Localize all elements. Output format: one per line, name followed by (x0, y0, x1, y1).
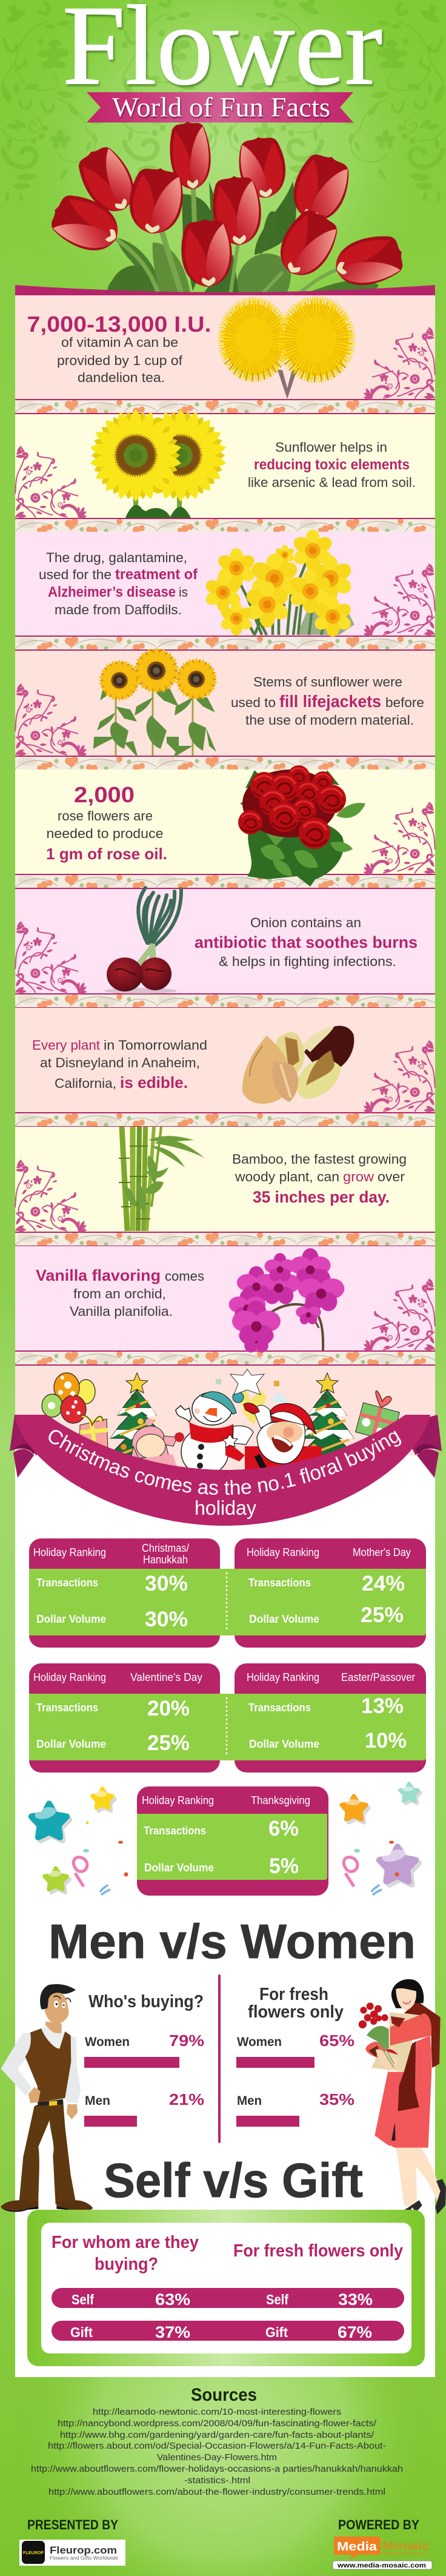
curved ribbon banner (15, 1415, 430, 1526)
tulip bouquet (45, 120, 408, 297)
logo: Media Mosaic: Differentiate yourself... (382, 2552, 428, 2556)
sources: http://www.aboutflowers.com/about-the-flower-industry/consumer-trends.html (48, 2487, 385, 2497)
subtitle ribbon: World of Fun Facts (112, 92, 330, 122)
fact text: Vanilla planifolia. (70, 1304, 173, 1319)
powered by: POWERED BY (338, 2517, 419, 2532)
logo: Fleurop: FLEUROP (23, 2550, 44, 2555)
row: gift: Gift (265, 2324, 288, 2340)
panel: Christmas banner (10, 1366, 442, 1526)
fact text: comes (165, 1269, 204, 1284)
fact text (32, 1038, 207, 1092)
headings (52, 2233, 403, 2274)
presented by (19, 2517, 125, 2566)
table: Easter/Passover: Dollar Volume (249, 1738, 319, 1750)
fact text: at Disneyland in Anaheim, (40, 1055, 200, 1070)
icon: rose bouquet (238, 765, 365, 887)
sources: Valentines-Day-Flowers.htm (157, 2452, 277, 2463)
magenta band (15, 285, 435, 295)
table: Thanksgiving: 5% (269, 1854, 299, 1878)
ribbon tails (10, 1415, 442, 1478)
fact text (248, 440, 416, 490)
logo: Media Mosaic: Media (337, 2540, 378, 2554)
sources: Sources (191, 2385, 257, 2405)
panel: self vs gift (27, 2210, 425, 2366)
panel: dandelion fact (15, 295, 436, 414)
table: Christmas/Hanukkah: 30% (145, 1572, 188, 1595)
divider (218, 1974, 221, 2143)
table: Valentine's Day: 20% (147, 1697, 190, 1720)
fact text: dandelion tea. (78, 370, 165, 385)
fact text: like arsenic & lead from soil. (248, 475, 416, 490)
icon: three sunflowers (93, 645, 220, 758)
icon: red onions (104, 888, 181, 994)
table: Thanksgiving: Dollar Volume (144, 1862, 214, 1874)
table: Valentine's Day: Transactions (36, 1702, 98, 1714)
table: Mother's Day: Dollar Volume (249, 1613, 319, 1625)
powered by (333, 2517, 432, 2569)
table: Mother's Day (247, 1546, 411, 1627)
fact text: 2,000 (74, 782, 135, 807)
panel: onion fact (15, 888, 435, 1008)
icon: bamboo (119, 1127, 205, 1231)
panel: bamboo fact (15, 1127, 435, 1247)
logo: Fleurop (19, 2540, 125, 2566)
heading: Men v/s Women: Men v/s Women (48, 1914, 416, 1968)
panel: sunflower stems fact (15, 645, 435, 771)
sources: http://nancybond.wordpress.com/2008/04/09/fun-fascinating-flower-facts/ (58, 2418, 377, 2429)
sources: http://learnodo-newtonic.com/10-most-interesting-flowers (93, 2407, 341, 2417)
chart: who's buying: Women (85, 2035, 130, 2049)
fact text: antibiotic that soothes burns (195, 933, 418, 951)
chart: fresh flowers only: 65% (319, 2031, 354, 2050)
fact text: Onion contains an (250, 915, 361, 930)
row: gift: 37% (155, 2323, 190, 2341)
banner heading: holiday (195, 1497, 256, 1519)
chart: fresh flowers only: For fresh (259, 1985, 328, 2004)
chart: who's buying: 21% (169, 2090, 204, 2108)
row: gift (52, 2321, 404, 2341)
sources (31, 2385, 403, 2497)
table: Thanksgiving: 6% (268, 1817, 299, 1840)
fact text: the use of modern material. (245, 713, 414, 728)
table: Christmas/Hanukkah (33, 1542, 189, 1631)
fact text: needed to produce (46, 826, 164, 841)
table: Thanksgiving: Thanksgiving (251, 1794, 310, 1806)
panel: vanilla orchid fact (15, 1246, 436, 1366)
table: Mother's Day: 24% (362, 1572, 405, 1595)
fact text: is (179, 585, 188, 600)
fact text (36, 1266, 204, 1319)
fact text: Sunflower helps in (275, 440, 387, 455)
panel: Disneyland edible plants fact (15, 1008, 436, 1127)
fact text (231, 674, 424, 728)
chart: fresh flowers only (236, 1985, 354, 2127)
fact text: is edible. (120, 1073, 188, 1092)
sources: http://flowers.about.com/od/Special-Occasion-Flowers/a/14-Fun-Facts-About- (48, 2441, 386, 2451)
fact text: used for the (39, 567, 112, 582)
row: self: Self (72, 2292, 94, 2307)
fact text: used to (231, 695, 276, 710)
chart: who's buying: Who's buying? (88, 1992, 204, 2011)
sources: http://www.aboutflowers.com/flower-holidays-occasions-a parties/hanukkah/hanukkah (31, 2464, 403, 2474)
sources: http://www.bhg.com/gardening/yard/garden-care/fun-facts-about-plants/ (60, 2430, 374, 2440)
table: Easter/Passover: Transactions (248, 1702, 311, 1714)
logo: Fleurop: Fleurop.com (50, 2544, 117, 2556)
logo: Media Mosaic (333, 2537, 432, 2569)
table: Easter/Passover: 10% (365, 1729, 407, 1753)
table: Christmas/Hanukkah: Christmas/ (142, 1542, 189, 1554)
fact text: grow (343, 1169, 374, 1184)
fact text: reducing toxic elements (254, 457, 410, 473)
table: Mother's Day: Mother's Day (353, 1546, 411, 1558)
heading: Self v/s Gift: Self v/s Gift (104, 2153, 363, 2207)
row: gift: Gift (70, 2324, 93, 2340)
table: Christmas/Hanukkah: 30% (145, 1608, 188, 1631)
fact text: of vitamin A can be (61, 335, 178, 350)
fact text: Vanilla flavoring (36, 1266, 161, 1284)
fact text: provided by 1 cup of (57, 353, 183, 368)
fact text (46, 782, 167, 863)
table: Christmas/Hanukkah: Hanukkah (143, 1554, 188, 1566)
fact text: over (378, 1169, 405, 1184)
fact text: & helps in fighting infections. (219, 954, 396, 969)
fact text: Every plant (32, 1038, 101, 1053)
headings: For whom are they (52, 2233, 199, 2252)
fact text: in Tomorrowland (104, 1038, 207, 1053)
table: Easter/Passover: Holiday Ranking (247, 1671, 319, 1683)
fact text: Alzheimer’s disease (48, 584, 176, 600)
fact text: rose flowers are (58, 808, 153, 823)
chart: fresh flowers only: 35% (319, 2090, 354, 2108)
fact text: 35 inches per day. (253, 1188, 390, 1206)
row: gift: 67% (338, 2323, 372, 2341)
logo: Media Mosaic: Mosaic (382, 2540, 430, 2553)
table: Christmas/Hanukkah: Transactions (36, 1577, 98, 1589)
chart: who's buying (84, 1992, 204, 2127)
fact text: 1 gm of rose oil. (46, 845, 167, 863)
fact text: woody plant, can (235, 1169, 339, 1184)
illustration: man (1, 1984, 93, 2212)
fact text: from an orchid, (73, 1286, 166, 1301)
fact text (27, 312, 211, 385)
headings: buying? (95, 2255, 158, 2274)
headings: For fresh flowers only (233, 2241, 403, 2261)
fact text: 7,000-13,000 I.U. (27, 312, 211, 337)
panel: rose oil fact (15, 765, 436, 889)
table: Valentine's Day: 25% (147, 1731, 190, 1755)
table: Mother's Day: Holiday Ranking (247, 1546, 319, 1558)
table: Thanksgiving: Holiday Ranking (142, 1794, 214, 1806)
chart: fresh flowers only: flowers only (248, 2002, 344, 2022)
fact text (195, 915, 418, 969)
holiday tables row 2 (29, 1663, 426, 1773)
row: self: 63% (155, 2290, 190, 2309)
illustration: Christmas characters (42, 1369, 404, 1475)
white content panel (15, 1366, 435, 2377)
table: Easter/Passover: Easter/Passover (341, 1671, 415, 1683)
table: Easter/Passover: 13% (361, 1694, 404, 1718)
fact text: The drug, galantamine, (46, 550, 187, 565)
table: Thanksgiving (137, 1786, 328, 1896)
table: Thanksgiving: Transactions (144, 1825, 206, 1837)
illustration: woman with flowers (353, 1979, 446, 2218)
logo: Media Mosaic: www.media-mosaic.com (337, 2562, 426, 2569)
icon: nuts (242, 1026, 354, 1104)
chart: who's buying: Men (85, 2094, 110, 2108)
chart: fresh flowers only: Men (237, 2094, 262, 2108)
sources: -statistics-.html (184, 2475, 250, 2486)
fact text (232, 1152, 407, 1206)
panel: sunflower fact (15, 404, 435, 533)
icon: orchid (229, 1248, 344, 1352)
holiday tables row 1 (29, 1538, 426, 1648)
table: Christmas/Hanukkah: Dollar Volume (36, 1613, 106, 1625)
table: Easter/Passover (247, 1671, 415, 1753)
table: Christmas/Hanukkah: Holiday Ranking (33, 1546, 106, 1558)
decorative stars and confetti (32, 1783, 421, 1895)
table: Valentine's Day (33, 1671, 202, 1755)
chart: who's buying: 79% (169, 2031, 204, 2050)
icon: two sunflowers (84, 404, 232, 518)
fact text: made from Daffodils. (55, 602, 182, 617)
banner heading: Christmas comes as the no.1 floral buying (48, 1430, 401, 1495)
icon: dandelions (221, 300, 351, 399)
fact text (39, 550, 198, 617)
chart: fresh flowers only: Women (237, 2035, 282, 2049)
fact text: Stems of sunflower were (253, 674, 402, 689)
icon: daffodils (204, 529, 354, 637)
panel: daffodil fact (15, 529, 436, 651)
table: Valentine's Day: Holiday Ranking (33, 1671, 106, 1683)
table: Mother's Day: 25% (361, 1603, 404, 1627)
logo: Fleurop: Flowers and Gifts Worldwide (50, 2555, 118, 2561)
presented by: PRESENTED BY (27, 2517, 118, 2532)
table: Valentine's Day: Dollar Volume (36, 1738, 106, 1750)
table: Mother's Day: Transactions (248, 1577, 311, 1589)
row: self: 33% (338, 2290, 373, 2309)
table: Valentine's Day: Valentine's Day (130, 1671, 202, 1683)
row: self: Self (266, 2292, 288, 2307)
fact text: before (385, 695, 424, 710)
fact text: treatment of (115, 566, 198, 583)
fact text: Bamboo, the fastest growing (232, 1152, 407, 1167)
fact text: fill lifejackets (279, 692, 381, 711)
fact text: California, (55, 1076, 116, 1091)
row: self (52, 2288, 404, 2309)
